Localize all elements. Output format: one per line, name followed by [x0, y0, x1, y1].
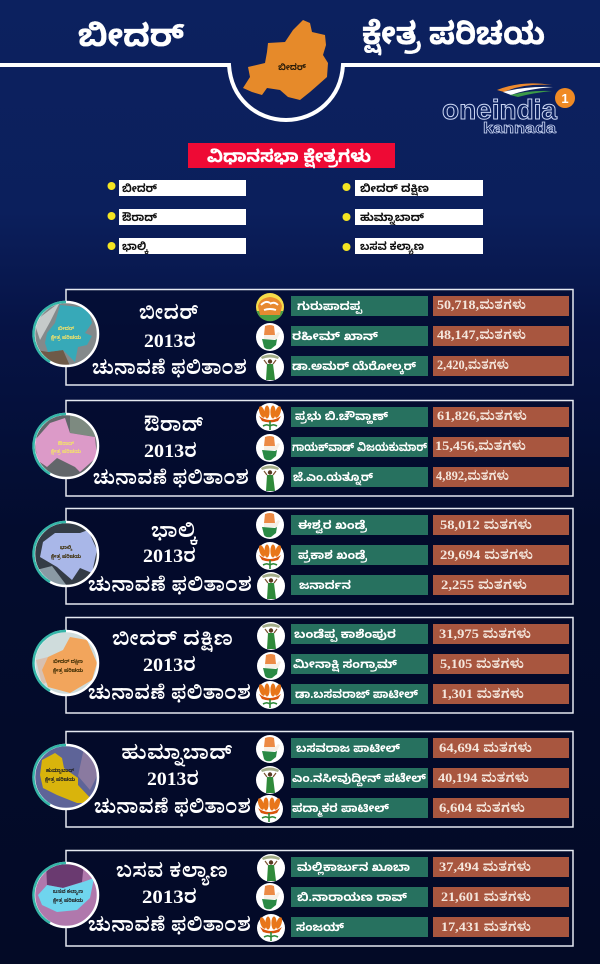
candidate row: ಮೀನಾಕ್ಷಿ ಸಂಗ್ರಾಮ್	[293, 658, 398, 673]
panel: Bidar	[33, 290, 573, 385]
candidate row	[291, 575, 428, 595]
map badge: ಕ್ಷೇತ್ರ ಪರಿಚಯ	[53, 667, 83, 674]
votes row: 5,105 ಮತಗಳು	[440, 656, 524, 671]
votes row	[433, 624, 569, 644]
list item	[342, 209, 483, 226]
map badge: ಔರಾದ್	[58, 441, 74, 447]
votes row	[433, 326, 569, 346]
votes row	[433, 798, 569, 818]
subtitle: ಚುನಾವಣೆ ಫಲಿತಾಂಶ	[92, 357, 247, 379]
votes row: 37,494 ಮತಗಳು	[439, 859, 531, 874]
map badge	[33, 631, 98, 695]
party icon	[256, 323, 284, 351]
votes row: 58,012 ಮತಗಳು	[440, 517, 532, 532]
candidate row: ಗಾಯಕ್‌ವಾಡ್ ವಿಜಯಕುಮಾರ್	[292, 441, 428, 454]
logo: oneindia kannada: 1	[561, 91, 569, 106]
party icon	[256, 403, 284, 431]
map badge: ಹುಮ್ನಾಬಾದ್	[46, 768, 74, 774]
votes row: 50,718,ಮತಗಳು	[437, 297, 526, 312]
votes row: 15,456,ಮತಗಳು	[435, 438, 526, 453]
list item: ಭಾಲ್ಕಿ	[122, 241, 149, 255]
candidate row: ಡಾ.ಬಸವರಾಜ್ ಪಾಟೀಲ್	[295, 689, 419, 701]
votes row	[433, 407, 569, 427]
candidate row	[291, 296, 428, 316]
votes row	[433, 917, 569, 937]
votes row	[433, 575, 569, 595]
subtitle: ಚುನಾವಣೆ ಫಲಿತಾಂಶ	[93, 467, 249, 489]
party icon	[257, 914, 285, 942]
title: right: ಕ್ಷೇತ್ರ ಪರಿಚಯ	[362, 16, 545, 56]
votes row	[433, 467, 569, 487]
heading: ಔರಾದ್	[144, 415, 204, 436]
map badge	[33, 302, 98, 366]
candidate row: ಈಶ್ವರ ಖಂಡ್ರೆ	[298, 519, 367, 534]
party icon	[256, 883, 284, 911]
candidate row: ಬಂಡೆಪ್ಪ ಕಾಶೆಂಪುರ	[294, 628, 396, 642]
candidate row	[291, 887, 428, 907]
map badge	[33, 522, 98, 590]
panel: Bidar South	[33, 618, 573, 713]
constituency list	[108, 180, 483, 255]
year: 2013ರ	[143, 546, 196, 567]
candidate row	[291, 515, 428, 535]
candidate row: ಎಂ.ನಸೀವುದ್ದೀನ್ ಪಟೇಲ್	[292, 772, 427, 787]
logo: oneindia kannada	[442, 83, 575, 137]
votes row	[433, 515, 569, 535]
icon: Bidar district map	[243, 20, 328, 100]
votes row: 29,694 ಮತಗಳು	[440, 547, 533, 562]
candidate row	[291, 545, 428, 565]
year: 2013ರ	[144, 441, 197, 462]
map badge	[33, 414, 98, 478]
candidate row	[291, 437, 428, 457]
map badge: ಕ್ಷೇತ್ರ ಪರಿಚಯ	[45, 776, 75, 783]
party icon	[256, 293, 284, 321]
party icon	[257, 854, 285, 882]
subtitle: ಚುನಾವಣೆ ಫಲಿತಾಂಶ	[88, 574, 252, 596]
list item: ಬೀದರ್	[122, 183, 157, 195]
logo: oneindia kannada: oneindia	[442, 94, 557, 125]
party icon	[257, 652, 285, 680]
votes row	[433, 738, 569, 758]
votes row: 31,975 ಮತಗಳು	[439, 626, 531, 641]
panel: Bhalki	[33, 508, 573, 604]
panel: Humnabad	[33, 732, 573, 827]
votes row	[433, 887, 569, 907]
map badge: ಕ್ಷೇತ್ರ ಪರಿಚಯ	[51, 334, 81, 341]
candidate row: ಸಂಜಯ್	[296, 921, 345, 934]
map badge	[33, 862, 98, 927]
votes row	[433, 356, 569, 376]
votes row: 21,601 ಮತಗಳು	[441, 889, 531, 904]
party icon	[256, 681, 284, 709]
subtitle: ಚುನಾವಣೆ ಫಲಿತಾಂಶ	[88, 914, 251, 936]
votes row	[433, 768, 569, 788]
votes row	[433, 437, 569, 457]
votes row: 6,604 ಮತಗಳು	[439, 800, 525, 815]
list item: ಬೀದರ್ ದಕ್ಷಿಣ	[360, 183, 429, 197]
map badge: ಕ್ಷೇತ್ರ ಪರಿಚಯ	[53, 897, 83, 904]
header line with U-shaped cradle	[0, 65, 600, 120]
heading: ಹುಮ್ನಾಬಾದ್	[121, 743, 233, 767]
candidate row	[291, 798, 428, 818]
party icon	[256, 464, 284, 492]
votes row: 61,826,ಮತಗಳು	[437, 408, 527, 423]
list item	[342, 238, 483, 255]
party icon	[256, 542, 284, 570]
heading banner: assembly constituencies	[188, 143, 395, 169]
list item	[342, 180, 483, 197]
votes row	[433, 654, 569, 674]
heading: ಬೀದರ್	[139, 303, 199, 324]
candidate row	[291, 768, 428, 788]
list item: ಹುಮ್ನಾಬಾದ್	[360, 212, 425, 226]
map badge: ಬಸವ ಕಲ್ಯಾಣ	[53, 889, 83, 896]
candidate row	[291, 326, 428, 346]
candidate row	[291, 654, 428, 674]
panel: Basavakalyan	[33, 850, 573, 946]
map badge	[33, 745, 100, 809]
party icon	[257, 622, 285, 650]
candidate row	[291, 684, 428, 704]
party icon	[256, 434, 284, 462]
party icon	[257, 572, 285, 600]
candidate row	[291, 407, 428, 427]
candidate row: ರಹೀಮ್ ಖಾನ್	[292, 330, 379, 343]
votes row: 1,301 ಮತಗಳು	[441, 686, 524, 701]
candidate row	[291, 356, 428, 376]
subtitle: ಚುನಾವಣೆ ಫಲಿತಾಂಶ	[88, 682, 251, 704]
votes row: 2,420,ಮತಗಳು	[437, 357, 509, 372]
map badge: ಬೀದರ್	[58, 326, 75, 332]
map badge: ಬೀದರ್ ದಕ್ಷಿಣ	[53, 659, 83, 665]
votes row	[433, 296, 569, 316]
candidate row: ಪ್ರಭು ಬಿ.ಚೌವ್ಹಾಣ್	[295, 410, 389, 424]
heading: ಬಸವ ಕಲ್ಯಾಣ	[116, 861, 228, 886]
candidate row: ಜೆ.ಎಂ.ಯತ್ನೂರ್	[293, 471, 374, 486]
title: left: ಬೀದರ್	[78, 18, 185, 53]
year: 2013ರ	[144, 331, 196, 352]
year: 2013ರ	[142, 887, 197, 908]
votes row: 17,431 ಮತಗಳು	[441, 919, 531, 934]
candidate row: ಗುರುಪಾದಪ್ಪ	[297, 301, 363, 314]
party icon	[256, 735, 284, 763]
candidate row: ಬಿ.ನಾರಾಯಣ ರಾವ್	[297, 891, 408, 904]
year: 2013ರ	[147, 769, 199, 790]
list item: ಔರಾದ್	[122, 211, 158, 224]
candidate row	[291, 857, 428, 877]
panel: Aurad	[33, 400, 573, 496]
votes row: 4,892,ಮತಗಳು	[436, 468, 509, 483]
list item	[108, 209, 246, 225]
votes row: 48,147,ಮತಗಳು	[437, 327, 526, 342]
year: 2013ರ	[143, 655, 196, 676]
candidate row	[291, 738, 428, 758]
votes row	[433, 857, 569, 877]
map badge: ಭಾಲ್ಕಿ	[60, 545, 73, 551]
party icon	[256, 511, 284, 539]
list item	[108, 180, 246, 196]
candidate row: ಮಲ್ಲಿಕಾರ್ಜುನ ಖೂಬಾ	[297, 861, 410, 876]
votes row: 2,255 ಮತಗಳು	[441, 577, 527, 592]
party icon	[256, 353, 284, 381]
party icon	[256, 766, 284, 794]
votes row: 40,194 ಮತಗಳು	[438, 770, 529, 785]
heading: ಭಾಲ್ಕಿ	[151, 521, 198, 545]
candidate row: ಪದ್ಮಾಕರ ಪಾಟೀಲ್	[292, 803, 390, 817]
logo: oneindia kannada: kannada	[483, 120, 557, 137]
candidate row: ಬಸವರಾಜ ಪಾಟೀಲ್	[296, 743, 401, 755]
votes row	[433, 684, 569, 704]
candidate row	[291, 917, 428, 937]
heading banner: assembly constituencies: ವಿಧಾನಸಭಾ ಕ್ಷೇತ್ರಗಳು	[207, 147, 371, 169]
candidate row: ಜನಾರ್ದನ	[299, 580, 351, 592]
map badge: ಕ್ಷೇತ್ರ ಪರಿಚಯ	[51, 448, 81, 455]
party icon	[255, 795, 283, 823]
votes row: 64,694 ಮತಗಳು	[439, 740, 532, 755]
list item	[108, 238, 246, 255]
heading: ಬೀದರ್ ದಕ್ಷಿಣ	[112, 629, 233, 652]
map badge: ಕ್ಷೇತ್ರ ಪರಿಚಯ	[51, 553, 81, 560]
list item: ಬಸವ ಕಲ್ಯಾಣ	[360, 241, 424, 255]
candidate row: ಪ್ರಕಾಶ ಖಂಡ್ರೆ	[298, 549, 367, 563]
votes row	[433, 545, 569, 565]
candidate row	[291, 467, 428, 487]
candidate row: ಡಾ.ಅಮರ್ ಯೆರೋಲ್ಕರ್	[292, 360, 417, 375]
icon: Bidar district map: ಬೀದರ್	[278, 62, 307, 72]
candidate row	[291, 624, 428, 644]
subtitle: ಚುನಾವಣೆ ಫಲಿತಾಂಶ	[94, 796, 251, 818]
